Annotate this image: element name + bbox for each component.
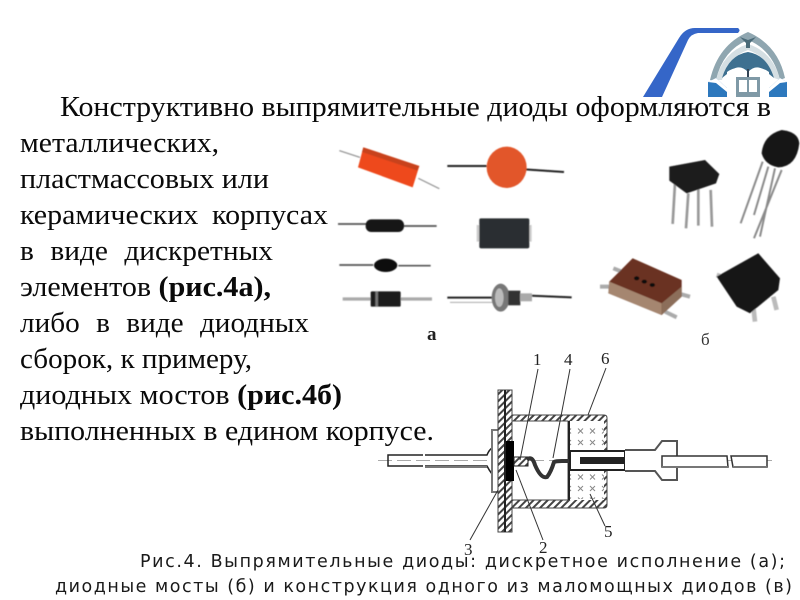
- photos: discrete diodes: [338, 147, 572, 312]
- text line 2: металлических,: [20, 127, 219, 159]
- text line 10: выполненных в едином корпусе.: [20, 415, 434, 447]
- part numbers: 4: [564, 350, 573, 369]
- label: а: а: [427, 324, 437, 345]
- left lead: [388, 448, 492, 474]
- diode cross-section diagram: [378, 349, 776, 559]
- bridge: brown SMD: [600, 258, 690, 317]
- diode: metal stud: [447, 284, 572, 312]
- caption: [55, 552, 792, 597]
- post: [514, 457, 528, 466]
- part numbers: 2: [539, 538, 548, 557]
- part numbers: [464, 349, 612, 559]
- diode: orange axial: [339, 147, 439, 189]
- text line 3: пластмассовых или: [20, 163, 269, 195]
- photos: diode bridges: [600, 130, 799, 322]
- part numbers: 6: [601, 349, 610, 368]
- caption line 1: Рис.4. Выпрямительные диоды: дискретное исполнение (а);: [140, 552, 785, 572]
- text line 4: керамических корпусах: [20, 199, 329, 231]
- text line 1: Конструктивно выпрямительные диоды оформляются в: [60, 91, 771, 123]
- washer: [492, 430, 498, 492]
- text line 7: либо в виде диодных: [20, 307, 309, 339]
- caption line 2: диодные мосты (б) и конструкция одного из маломощных диодов (в): [55, 577, 792, 597]
- bridge: round with four pins: [741, 130, 799, 238]
- right lead: [662, 456, 767, 467]
- logo: [643, 28, 787, 97]
- can body: [512, 415, 607, 508]
- diode: small black: [339, 259, 431, 272]
- main text block: [20, 91, 771, 447]
- tube and terminal: [570, 441, 677, 480]
- text line 8: сборок, к примеру,: [20, 343, 252, 375]
- logo: blue swoosh: [643, 28, 740, 97]
- diode: black SMD: [477, 218, 532, 248]
- text line 9: диодных мостов (рис.4б): [20, 379, 342, 411]
- leader lines: [470, 368, 606, 540]
- text line 6: элементов (рис.4а),: [20, 271, 271, 303]
- part numbers: 5: [604, 522, 612, 541]
- centre line: [378, 460, 776, 462]
- diode: black cylinder: [343, 291, 432, 307]
- diode: orange disc: [447, 147, 564, 188]
- bridge: black SMD: [717, 253, 780, 322]
- bridge: square with four pins: [669, 160, 719, 228]
- crystal: [506, 441, 514, 481]
- text line 5: в виде дискретных: [20, 235, 273, 267]
- logo: crest: [708, 31, 787, 97]
- flange: [498, 390, 512, 532]
- part numbers: 1: [533, 350, 542, 369]
- diode: black glass: [338, 219, 437, 232]
- spring wire: [527, 458, 590, 477]
- label: б: б: [701, 330, 710, 349]
- part numbers: 3: [464, 540, 472, 559]
